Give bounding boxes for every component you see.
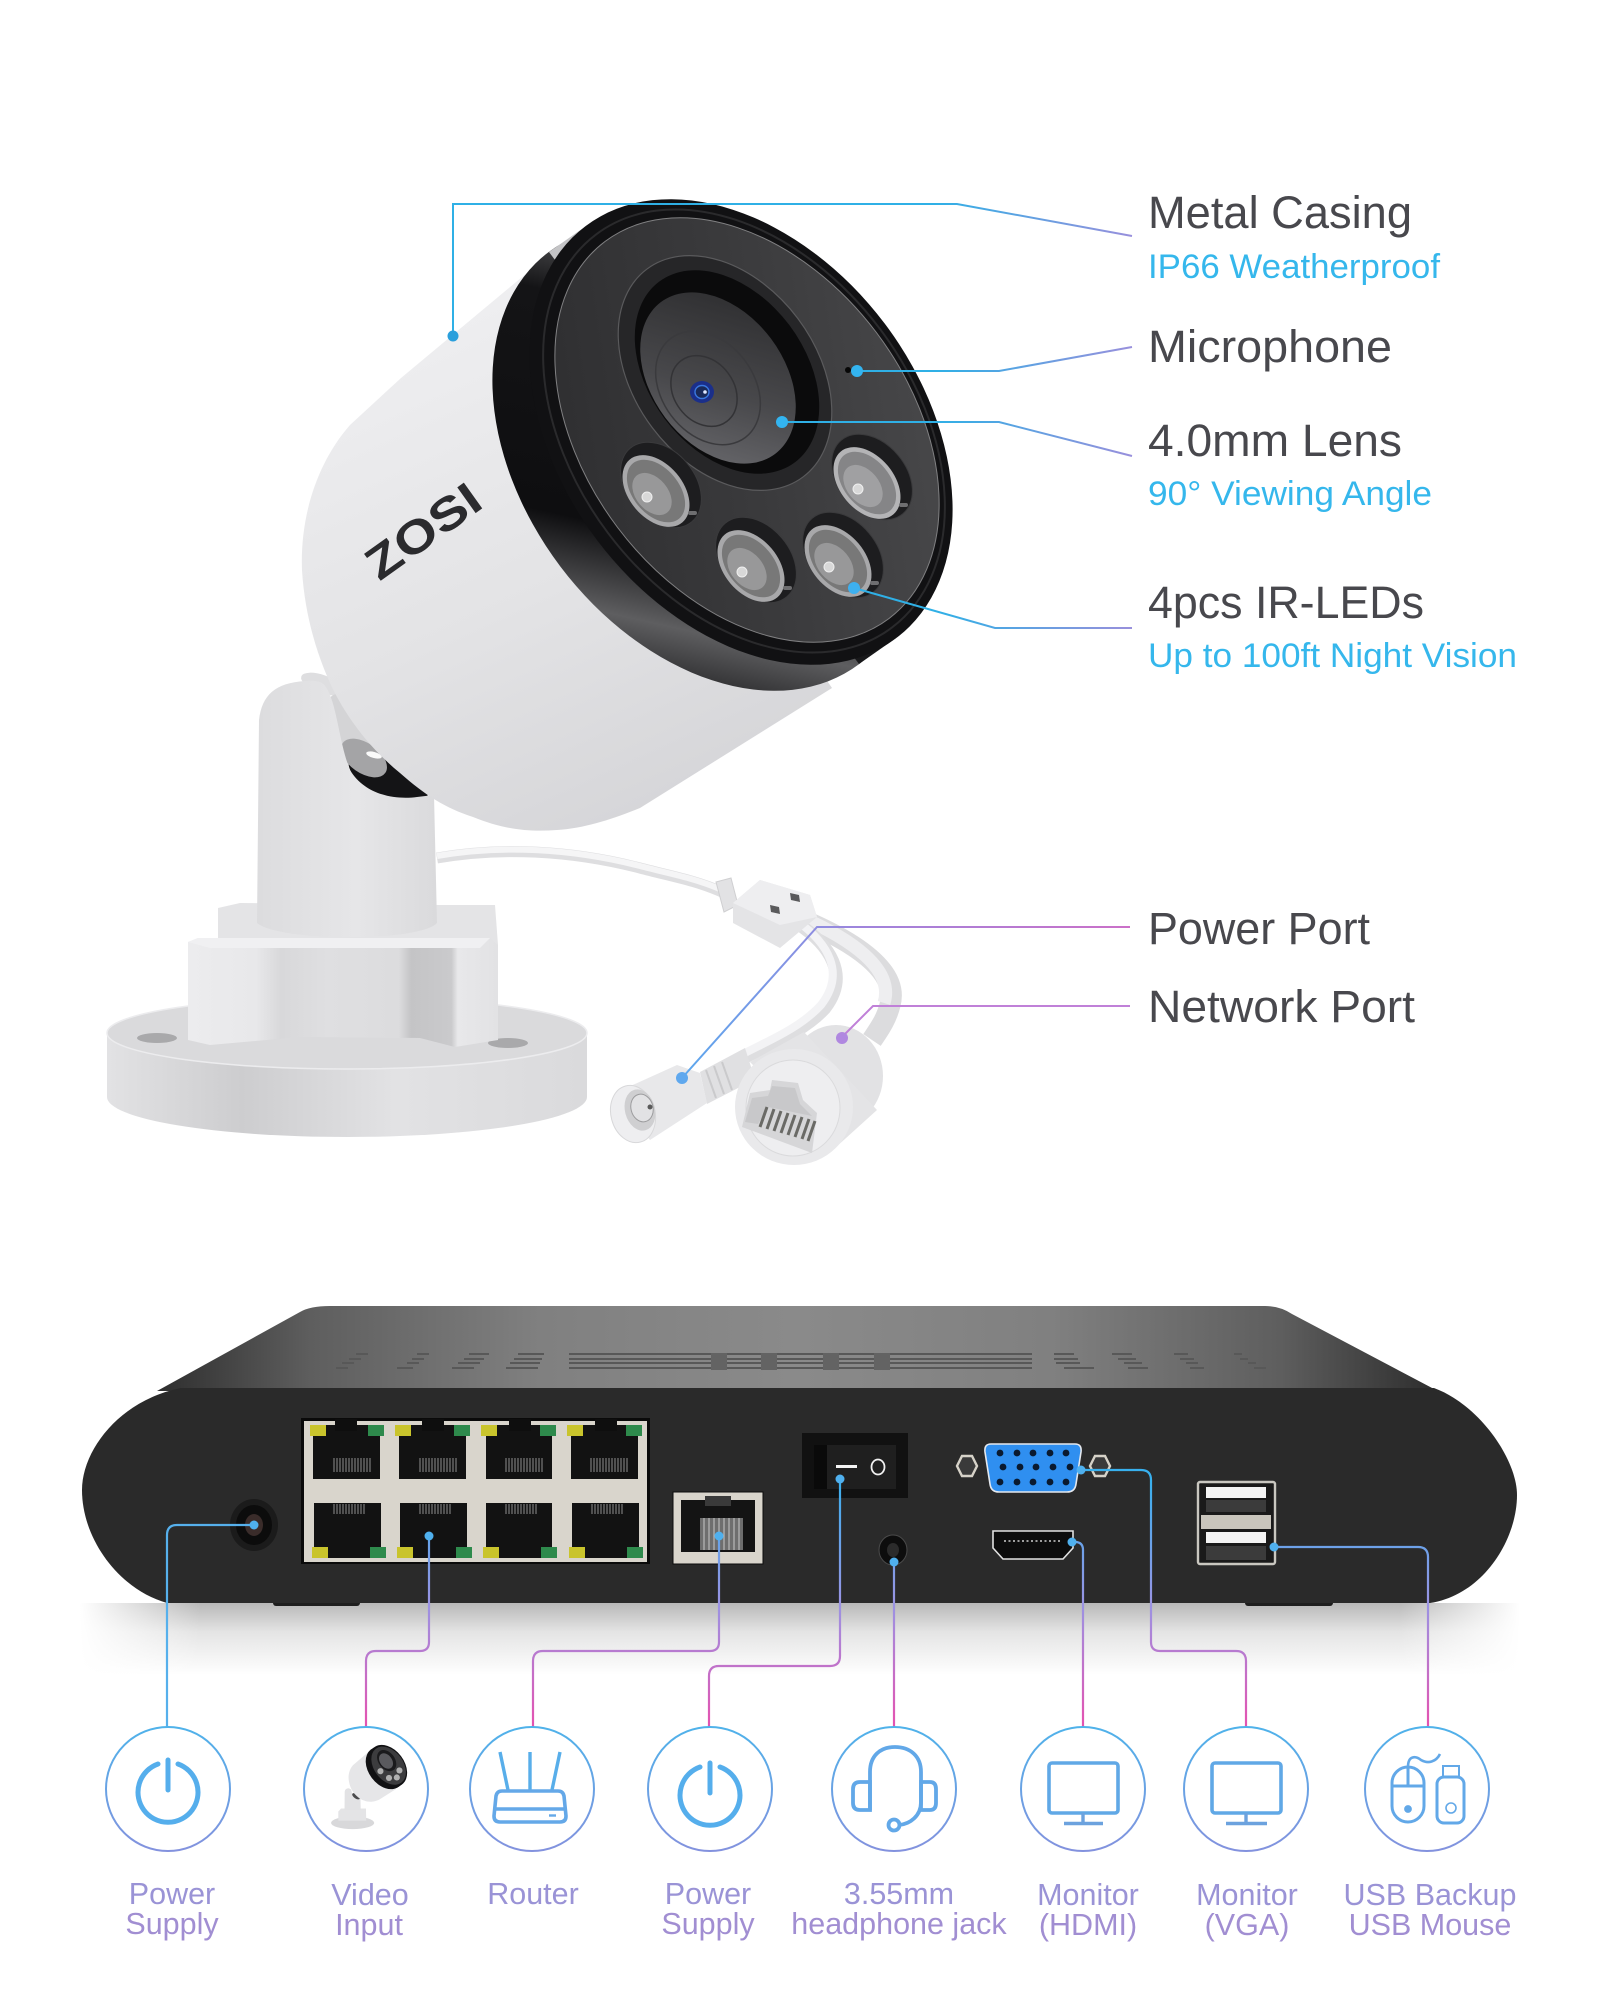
label: lens: 4.0mm Lens <box>1148 415 1402 466</box>
top row ports <box>313 1425 638 1479</box>
camera mount base plate <box>107 997 587 1137</box>
black bezel band <box>405 144 1003 772</box>
HDMI port <box>993 1531 1073 1559</box>
NVR floor shadow <box>80 1603 1520 1675</box>
label: power supply: Power <box>129 1877 215 1911</box>
metal casing leader <box>453 204 1132 336</box>
label: USB: USB Backup <box>1344 1878 1516 1912</box>
IR LED leader <box>854 588 1132 628</box>
camera logo: ZOSI <box>355 472 491 590</box>
camera mount star bracket <box>188 903 498 1047</box>
icon: VGA monitor <box>1184 1727 1308 1851</box>
label: monitor HDMI: Monitor <box>1037 1878 1139 1912</box>
line: headphone jack <box>893 1562 895 1727</box>
connection labels <box>125 1877 1516 1942</box>
label: monitor VGA: (VGA) <box>1205 1908 1289 1942</box>
camera callout lines <box>448 204 1132 1084</box>
NVR feet <box>273 1600 1333 1606</box>
camera front face <box>405 118 1040 772</box>
camera lens <box>574 214 876 532</box>
label: video input: Video <box>331 1878 409 1912</box>
line: VGA monitor <box>1081 1470 1246 1727</box>
power rocker switch <box>802 1433 908 1498</box>
VGA screw left <box>957 1456 977 1476</box>
network port leader <box>842 1006 1130 1037</box>
line: HDMI monitor <box>1072 1542 1083 1727</box>
line: power supply <box>167 1525 254 1727</box>
label: lens <box>1148 415 1432 513</box>
label: microphone: Microphone <box>1148 321 1392 372</box>
yellow status LEDs <box>310 1425 585 1558</box>
icon: USB mouse and flash drive <box>1365 1727 1489 1851</box>
camera feature labels <box>1148 187 1517 1032</box>
camera mount pillar <box>257 681 437 937</box>
IR LED 2 <box>815 418 929 536</box>
line: video input <box>366 1536 429 1727</box>
label: power port: Power Port <box>1148 903 1370 954</box>
label: network port: Network Port <box>1148 981 1416 1032</box>
microphone leader <box>855 347 1132 371</box>
audio jack <box>879 1535 907 1565</box>
line: USB <box>1274 1547 1428 1727</box>
label: power supply two: Power <box>665 1877 751 1911</box>
label: video input: Input <box>335 1908 403 1942</box>
label: IR LEDs <box>1148 577 1517 675</box>
NVR top surface <box>157 1306 1434 1391</box>
NVR connector lines <box>167 1466 1428 1727</box>
camera cable <box>437 850 891 1057</box>
power jack <box>230 1499 278 1551</box>
icon: router <box>470 1727 594 1851</box>
icon: headset <box>832 1727 956 1851</box>
microphone hole <box>845 367 851 373</box>
front rim <box>442 118 1040 746</box>
network port connector <box>735 1025 883 1165</box>
label: IR LEDs: 4pcs IR-LEDs <box>1148 577 1424 628</box>
icon: HDMI monitor <box>1021 1727 1145 1851</box>
label: metal casing <box>1148 187 1440 286</box>
NVR recorder <box>80 1306 1520 1675</box>
NVR top vents <box>336 1353 1266 1370</box>
line: router <box>533 1536 719 1727</box>
label: USB: USB Mouse <box>1349 1908 1511 1942</box>
label: metal casing: IP66 Weatherproof <box>1148 248 1440 286</box>
cable splitter block <box>716 878 817 948</box>
label: power supply: Supply <box>125 1907 219 1941</box>
line: power supply two <box>709 1479 840 1727</box>
connector dots <box>250 1466 1278 1566</box>
IR LED 1 <box>604 426 718 544</box>
top row notches <box>335 1419 617 1431</box>
label: power supply two: Supply <box>661 1907 755 1941</box>
face plate <box>476 144 1018 716</box>
callout dots <box>448 330 863 1084</box>
USB ports <box>1198 1482 1275 1564</box>
icon: video input camera <box>304 1727 428 1851</box>
NVR front panel <box>82 1388 1517 1603</box>
VGA port <box>957 1444 1110 1492</box>
label: router: Router <box>487 1877 579 1911</box>
icon: power supply <box>106 1727 230 1851</box>
IR LED 3 <box>699 501 813 619</box>
swivel joint <box>298 668 437 819</box>
green status LEDs <box>368 1425 643 1558</box>
security camera photo <box>107 118 1040 1165</box>
lens leader <box>782 422 1132 456</box>
label: headphone jack: headphone jack <box>791 1907 1007 1941</box>
bottom row contacts <box>334 1504 622 1514</box>
eight port network switch <box>301 1418 650 1564</box>
camera body <box>302 262 832 831</box>
VGA screw right <box>1090 1456 1110 1476</box>
top row contacts <box>334 1458 627 1472</box>
IR LED 4 <box>786 496 900 614</box>
power port connector <box>604 1048 752 1148</box>
power port leader <box>682 927 1130 1078</box>
icon: power supply two <box>648 1727 772 1851</box>
label: IR LEDs: Up to 100ft Night Vision <box>1148 637 1517 675</box>
label: monitor VGA: Monitor <box>1196 1878 1298 1912</box>
bottom row ports <box>314 1503 639 1558</box>
label: lens: 90° Viewing Angle <box>1148 475 1432 513</box>
label: monitor HDMI: (HDMI) <box>1039 1908 1137 1942</box>
router network port <box>673 1492 763 1564</box>
label: metal casing: Metal Casing <box>1148 187 1412 238</box>
label: headphone jack: 3.55mm <box>844 1877 954 1911</box>
